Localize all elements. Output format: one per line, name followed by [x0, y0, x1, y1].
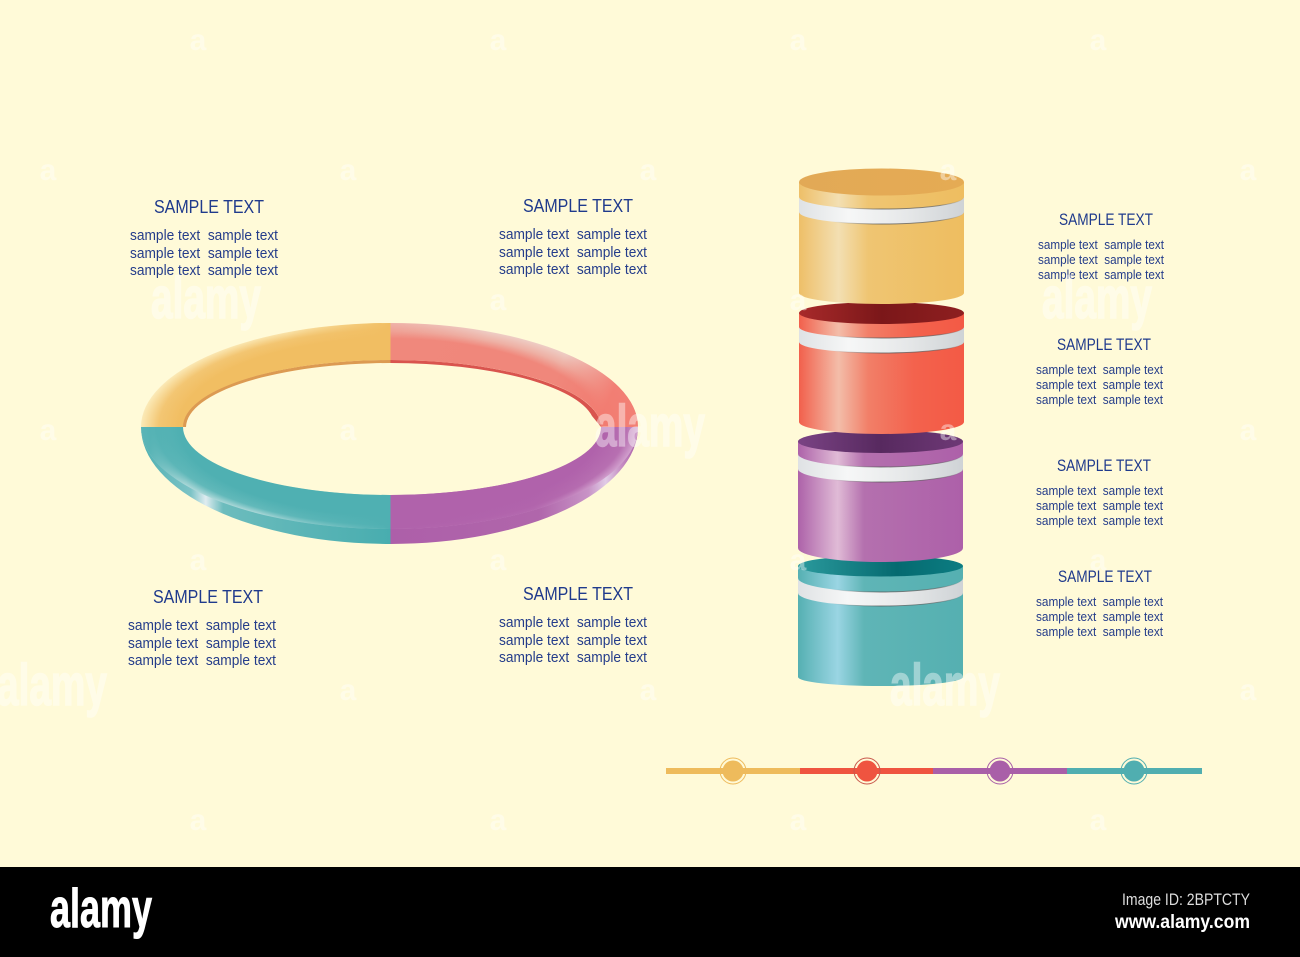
- ring segment: yellow: [141, 323, 390, 427]
- watermark: a: [490, 24, 507, 57]
- watermark: a: [790, 24, 807, 57]
- text block: bottom right of ring: SAMPLE TEXT: [523, 583, 633, 604]
- text block: yellow cylinder: sample text sample text: [1038, 237, 1164, 252]
- text block: purple cylinder: SAMPLE TEXT: [1057, 457, 1151, 475]
- text block: top left: [130, 196, 278, 279]
- legend marker: red: [854, 758, 880, 784]
- watermark: a: [940, 154, 957, 187]
- ring segment: teal: [141, 427, 390, 529]
- watermark: a: [340, 154, 357, 187]
- watermark: alamy: [595, 394, 705, 459]
- text block: yellow cylinder: sample text sample text: [1038, 267, 1164, 282]
- text block: top right of ring: sample text sample text: [499, 227, 647, 243]
- text block: bottom left: SAMPLE TEXT: [153, 586, 263, 607]
- text block: red cylinder: SAMPLE TEXT: [1057, 336, 1151, 354]
- legend marker: yellow: [720, 758, 746, 784]
- legend marker: purple: [987, 758, 1013, 784]
- watermark: a: [490, 284, 507, 317]
- watermark: a: [1090, 24, 1107, 57]
- footer image id: Image ID: 2BPTCTY: [1122, 890, 1250, 909]
- text block: bottom left: sample text sample text: [128, 653, 276, 669]
- ring chart: [141, 323, 638, 544]
- legend marker: teal: [1121, 758, 1147, 784]
- text block: bottom left: sample text sample text: [128, 636, 276, 652]
- text block: top right of ring: sample text sample text: [499, 262, 647, 278]
- cylinder: teal: [798, 556, 963, 686]
- ring inner wall: red: [390, 360, 601, 427]
- text block: purple cylinder: sample text sample text: [1036, 498, 1163, 513]
- watermark: a: [790, 804, 807, 837]
- text block: teal cylinder: sample text sample text: [1036, 609, 1163, 624]
- text block: top right of ring: SAMPLE TEXT: [523, 195, 633, 216]
- legend timeline: [666, 758, 1202, 784]
- cylinder: red: [799, 302, 964, 434]
- text block: teal cylinder: sample text sample text: [1036, 624, 1163, 639]
- text block: purple cylinder: sample text sample text: [1036, 483, 1163, 498]
- watermark: a: [1240, 414, 1257, 447]
- text block: yellow cylinder: SAMPLE TEXT: [1059, 211, 1153, 229]
- ring side wall: teal: [141, 427, 390, 544]
- ring segment: red: [390, 323, 638, 427]
- ring inner wall: yellow: [181, 360, 390, 427]
- watermark: alamy: [151, 266, 261, 331]
- watermark: a: [1090, 544, 1107, 577]
- watermark: a: [40, 154, 57, 187]
- ring segment: purple: [390, 427, 638, 529]
- watermark: a: [940, 414, 957, 447]
- text block: top right of ring: sample text sample text: [499, 245, 647, 261]
- watermark: a: [190, 24, 207, 57]
- watermark: a: [790, 544, 807, 577]
- cylinder: yellow: [799, 168, 964, 304]
- watermark: a: [640, 674, 657, 707]
- text block: purple cylinder: sample text sample text: [1036, 513, 1163, 528]
- text block: red cylinder: [1036, 336, 1163, 407]
- text block: top right of ring: [499, 195, 647, 278]
- watermark: a: [40, 414, 57, 447]
- watermark: a: [190, 804, 207, 837]
- watermark: a: [340, 674, 357, 707]
- footer url: www.alamy.com: [1114, 912, 1250, 933]
- ring side wall: purple: [390, 427, 638, 544]
- text block: teal cylinder: [1036, 568, 1163, 639]
- text block: bottom right of ring: [499, 583, 647, 666]
- cylinder: purple: [798, 430, 963, 562]
- watermark: alamy: [890, 653, 1000, 718]
- watermark: a: [640, 154, 657, 187]
- footer bar: [0, 867, 1300, 957]
- footer logo: alamy: [50, 877, 152, 939]
- text block: purple cylinder: [1036, 457, 1163, 528]
- watermark: a: [190, 544, 207, 577]
- text block: top left: sample text sample text: [130, 263, 278, 279]
- text block: bottom left: sample text sample text: [128, 618, 276, 634]
- watermark: alamy: [1042, 266, 1152, 331]
- text block: bottom left: [128, 586, 276, 669]
- text block: bottom right of ring: sample text sample text: [499, 615, 647, 631]
- watermark: a: [490, 804, 507, 837]
- text block: top left: sample text sample text: [130, 246, 278, 262]
- watermark: alamy: [0, 653, 107, 718]
- text block: bottom right of ring: sample text sample text: [499, 633, 647, 649]
- text block: yellow cylinder: [1038, 211, 1164, 282]
- text block: yellow cylinder: sample text sample text: [1038, 252, 1164, 267]
- watermark: a: [1240, 674, 1257, 707]
- text block: teal cylinder: SAMPLE TEXT: [1058, 568, 1152, 586]
- watermark: a: [340, 414, 357, 447]
- text block: top left: SAMPLE TEXT: [154, 196, 264, 217]
- text block: red cylinder: sample text sample text: [1036, 392, 1163, 407]
- text block: red cylinder: sample text sample text: [1036, 362, 1163, 377]
- text block: teal cylinder: sample text sample text: [1036, 594, 1163, 609]
- watermark: a: [790, 284, 807, 317]
- watermark: a: [490, 544, 507, 577]
- text block: bottom right of ring: sample text sample text: [499, 650, 647, 666]
- cylinder stack: [798, 168, 964, 686]
- watermark: a: [1240, 154, 1257, 187]
- watermark: a: [1090, 804, 1107, 837]
- text block: top left: sample text sample text: [130, 228, 278, 244]
- text block: red cylinder: sample text sample text: [1036, 377, 1163, 392]
